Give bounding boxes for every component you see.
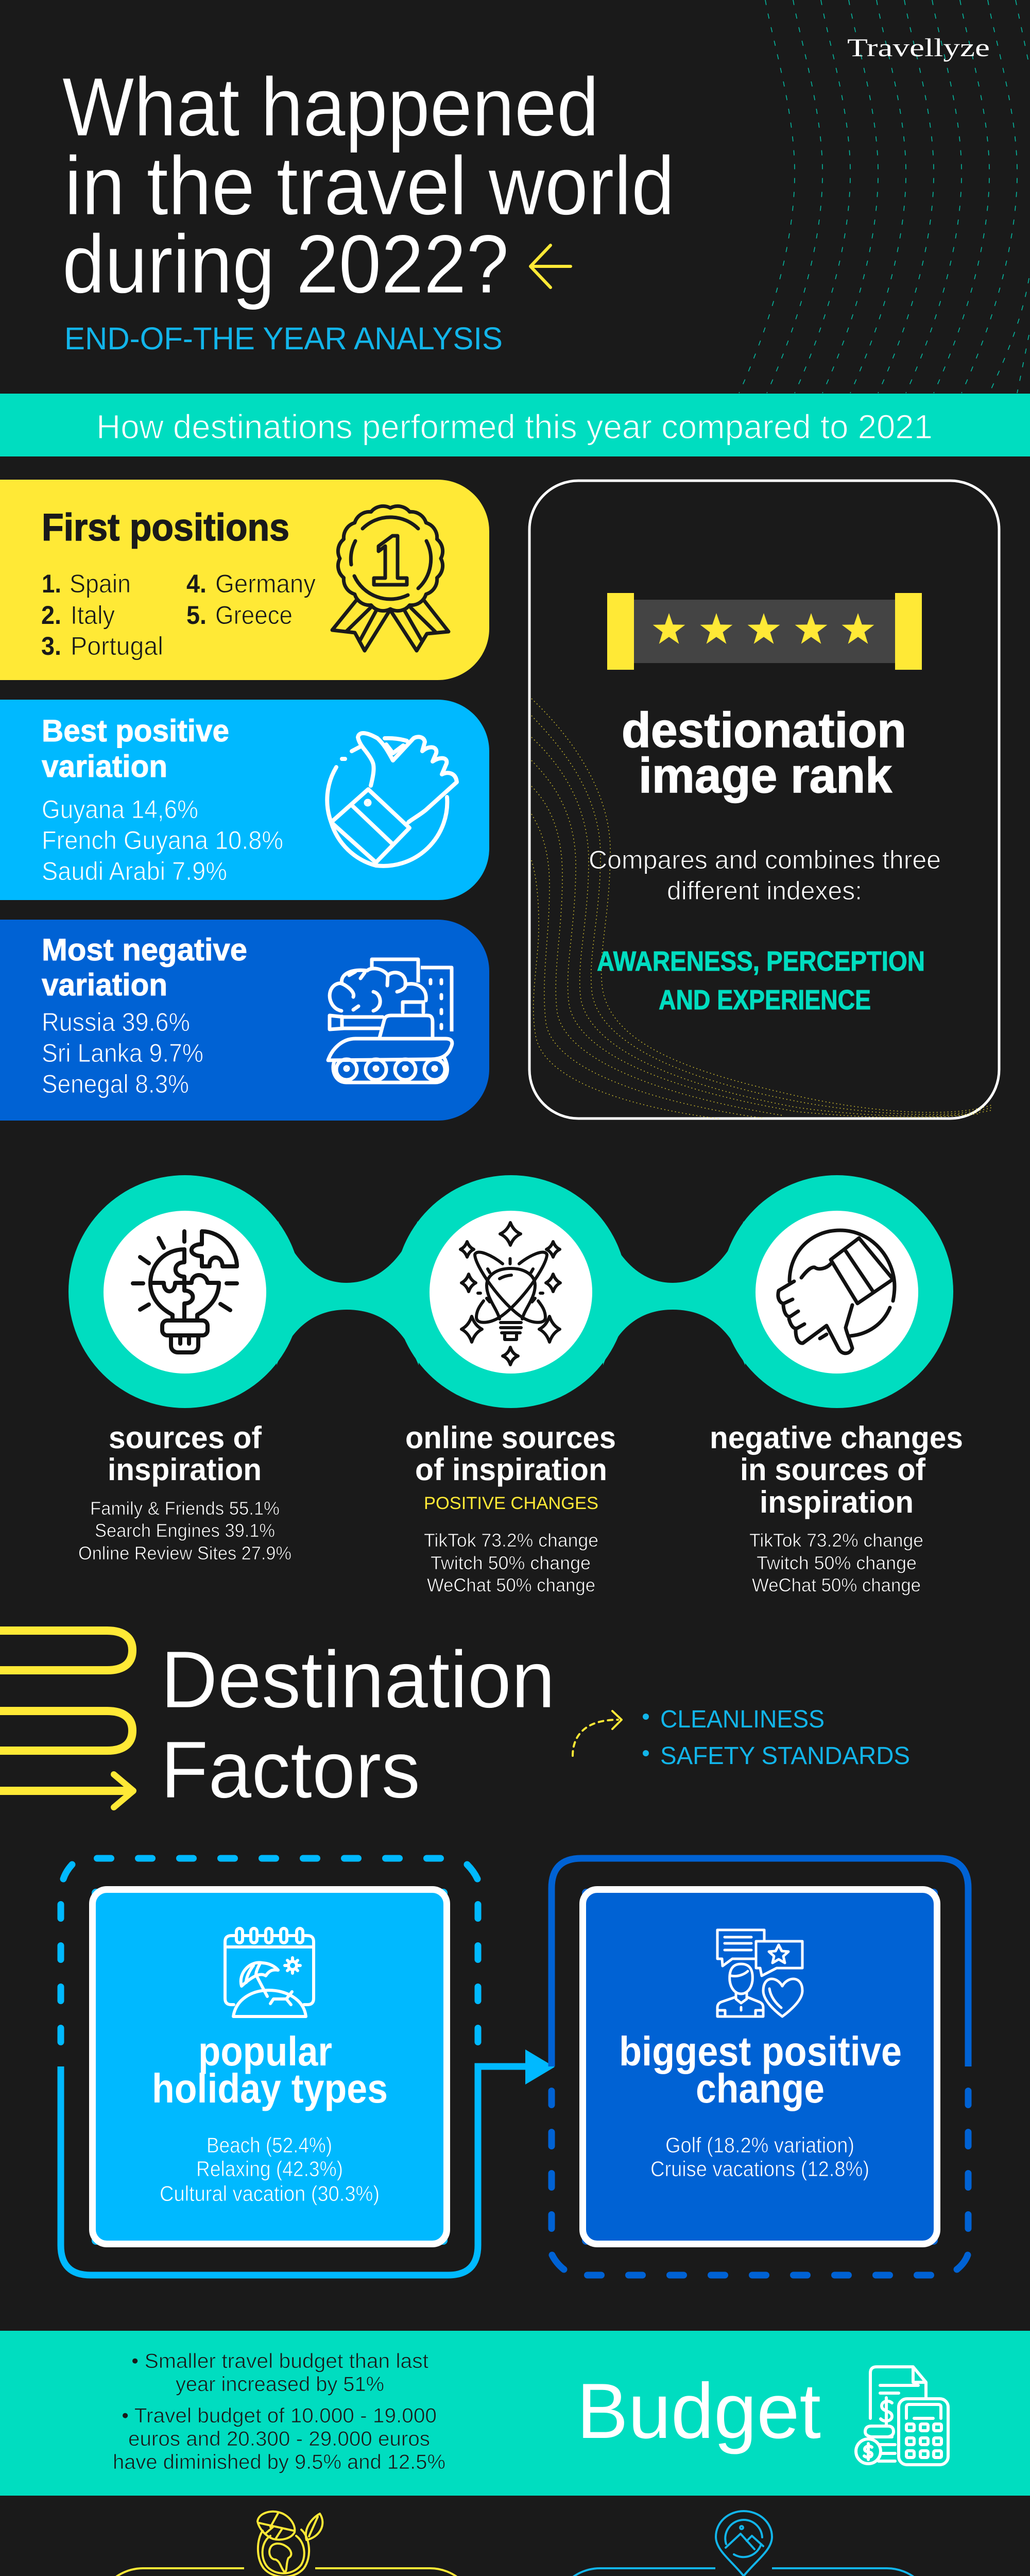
highlighted indexes xyxy=(597,946,925,1015)
text block: online sources of inspiration: TikTok 73.2% change xyxy=(424,1530,598,1551)
description text: Compares and combines three xyxy=(589,845,941,874)
description text: different indexes: xyxy=(667,876,862,905)
icon: calculator and coins xyxy=(856,2367,948,2465)
text block: sources of inspiration: Online Review Sites 27.9% xyxy=(78,1543,291,1564)
title: What happened xyxy=(62,61,599,154)
panel: first positions xyxy=(0,480,489,680)
text block: sources of inspiration: sources of xyxy=(109,1420,262,1455)
text block: negative changes in sources of inspiration: in sources of xyxy=(740,1452,926,1487)
panel: best positive variation xyxy=(0,700,489,900)
text block: online sources of inspiration: POSITIVE CHANGES xyxy=(424,1494,598,1513)
ranking list: Portugal xyxy=(71,632,163,660)
panel: sustainable travel behaviours xyxy=(554,2511,933,2576)
panel: sustainability as a destination factor xyxy=(97,2512,476,2576)
heading: popular holiday types xyxy=(152,2028,388,2111)
heading: best positive variation: variation xyxy=(42,749,167,784)
heading: budget: Budget xyxy=(577,2367,821,2455)
panel: popular holiday types xyxy=(61,1858,526,2275)
ranking list xyxy=(41,569,316,660)
budget facts: have diminished by 9.5% and 12.5% xyxy=(113,2451,445,2473)
icon: tank and smoke xyxy=(328,959,452,1082)
title xyxy=(62,61,675,311)
logo: Travellyze: Travellyze xyxy=(847,33,990,62)
ranking list: 4. xyxy=(186,569,207,598)
list: destination factor bullets: SAFETY STANDARDS xyxy=(660,1742,910,1770)
panel: most negative variation xyxy=(0,920,489,1121)
heading: destination image rank xyxy=(622,703,906,803)
panel: destination image rank xyxy=(529,481,999,1119)
heading: destination factors: Destination xyxy=(161,1635,555,1725)
text block: negative changes in sources of inspiration xyxy=(710,1420,963,1596)
heading: best positive variation: Best positive xyxy=(42,714,229,748)
ranking list: 5. xyxy=(186,601,207,630)
banner: how destinations performed xyxy=(0,394,1030,456)
negative variation list: Russia 39.6% xyxy=(42,1008,190,1037)
ranking list: Germany xyxy=(215,569,316,598)
panel: biggest positive change xyxy=(552,1858,968,2275)
text block: online sources of inspiration: WeChat 50% change xyxy=(427,1574,595,1596)
positive variation list: Guyana 14,6% xyxy=(42,795,198,824)
positive change list: Cruise vacations (12.8%) xyxy=(650,2157,869,2181)
negative variation list: Senegal 8.3% xyxy=(42,1070,189,1098)
ranking list: Italy xyxy=(71,601,115,630)
banner: how destinations performed: How destinations performed this year compared to 2021 xyxy=(96,408,933,446)
arrow: dashed curve xyxy=(573,1711,622,1756)
heading: popular holiday types: popular xyxy=(198,2028,332,2074)
text block: negative changes in sources of inspiration: TikTok 73.2% change xyxy=(749,1530,923,1551)
arrow: yellow winding lines xyxy=(0,1631,133,1807)
budget facts: • Travel budget of 10.000 - 19.000 xyxy=(122,2404,437,2427)
arrow: connector to positive change xyxy=(525,2049,555,2084)
text block: negative changes in sources of inspiration: Twitch 50% change xyxy=(757,1552,917,1573)
budget facts: euros and 20.300 - 29.000 euros xyxy=(128,2428,430,2450)
icon: thumbs down xyxy=(778,1230,895,1353)
budget facts xyxy=(113,2350,445,2473)
holiday types list: Relaxing (42.3%) xyxy=(196,2157,343,2181)
budget facts: • Smaller travel budget than last xyxy=(131,2350,428,2372)
icon: map pin with mountains xyxy=(716,2511,772,2576)
connected circles: inspiration icons xyxy=(68,1175,953,1408)
ranking list: 2. xyxy=(41,601,61,630)
budget facts: year increased by 51% xyxy=(176,2373,384,2396)
heading: destination image rank: image rank xyxy=(639,748,892,803)
holiday types list: Beach (52.4%) xyxy=(207,2133,332,2157)
text block: online sources of inspiration: of inspiration xyxy=(415,1452,607,1487)
panel: budget band xyxy=(0,2331,1030,2496)
ranking list: Spain xyxy=(70,569,131,598)
ranking list: Greece xyxy=(215,601,293,630)
holiday types list xyxy=(160,2133,380,2206)
heading: biggest positive change xyxy=(619,2028,902,2111)
positive change list: Golf (18.2% variation) xyxy=(665,2133,854,2157)
positive variation list: French Guyana 10.8% xyxy=(42,826,283,855)
icon: five star rating bar xyxy=(607,593,922,670)
text block: online sources of inspiration: online sources xyxy=(405,1420,616,1455)
icon: earth with leaves xyxy=(258,2512,322,2576)
heading: popular holiday types: holiday types xyxy=(152,2065,388,2111)
text block: sources of inspiration: inspiration xyxy=(108,1452,262,1487)
arrow: title pointer xyxy=(530,245,571,287)
heading: destination factors xyxy=(161,1635,555,1815)
text block: negative changes in sources of inspiration: WeChat 50% change xyxy=(752,1574,921,1596)
text block: negative changes in sources of inspiration: inspiration xyxy=(760,1485,914,1519)
heading: destination image rank: destionation xyxy=(622,703,906,758)
holiday types list: Cultural vacation (30.3%) xyxy=(160,2181,380,2206)
highlighted indexes: AND EXPERIENCE xyxy=(659,985,871,1015)
subtitle: END-OF-THE YEAR ANALYSIS xyxy=(64,321,503,356)
ranking list: 3. xyxy=(41,632,61,660)
icon: medal xyxy=(332,506,449,651)
text block: sources of inspiration xyxy=(78,1420,291,1564)
negative variation list: Sri Lanka 9.7% xyxy=(42,1039,203,1067)
icon: puzzle light bulb xyxy=(133,1231,237,1352)
heading: most negative variation: variation xyxy=(42,968,167,1002)
text block: online sources of inspiration xyxy=(405,1420,616,1596)
heading: biggest positive change: biggest positive xyxy=(619,2028,902,2074)
decorative dotted curves xyxy=(531,699,991,1119)
positive variation list: Saudi Arabi 7.9% xyxy=(42,857,227,886)
heading: most negative variation xyxy=(42,933,247,1002)
description text xyxy=(589,845,941,905)
heading: first positions: First positions xyxy=(42,506,289,549)
icon: thumbs up xyxy=(327,733,457,866)
positive variation list xyxy=(42,795,283,886)
highlighted indexes: AWARENESS, PERCEPTION xyxy=(597,946,925,977)
title: in the travel world xyxy=(64,140,675,232)
text block: online sources of inspiration: Twitch 50% change xyxy=(431,1552,591,1573)
heading: biggest positive change: change xyxy=(696,2065,825,2111)
icon: beach calendar xyxy=(225,1928,314,2016)
list: destination factor bullets: CLEANLINESS xyxy=(660,1706,825,1733)
text block: sources of inspiration: Search Engines 39.1% xyxy=(95,1520,275,1541)
text block: negative changes in sources of inspiration: negative changes xyxy=(710,1420,963,1455)
negative variation list xyxy=(42,1008,203,1098)
heading: destination factors: Factors xyxy=(161,1725,420,1815)
heading: best positive variation xyxy=(42,714,229,784)
heading: most negative variation: Most negative xyxy=(42,933,247,967)
text block: sources of inspiration: Family & Friends 55.1% xyxy=(90,1498,280,1519)
title: during 2022? xyxy=(62,218,509,311)
icon: person with reviews xyxy=(717,1930,802,2016)
positive change list xyxy=(650,2133,869,2181)
list: destination factor bullets xyxy=(643,1706,910,1770)
icon: sparkling atom bulb xyxy=(460,1223,560,1365)
ranking list: 1. xyxy=(42,569,61,598)
